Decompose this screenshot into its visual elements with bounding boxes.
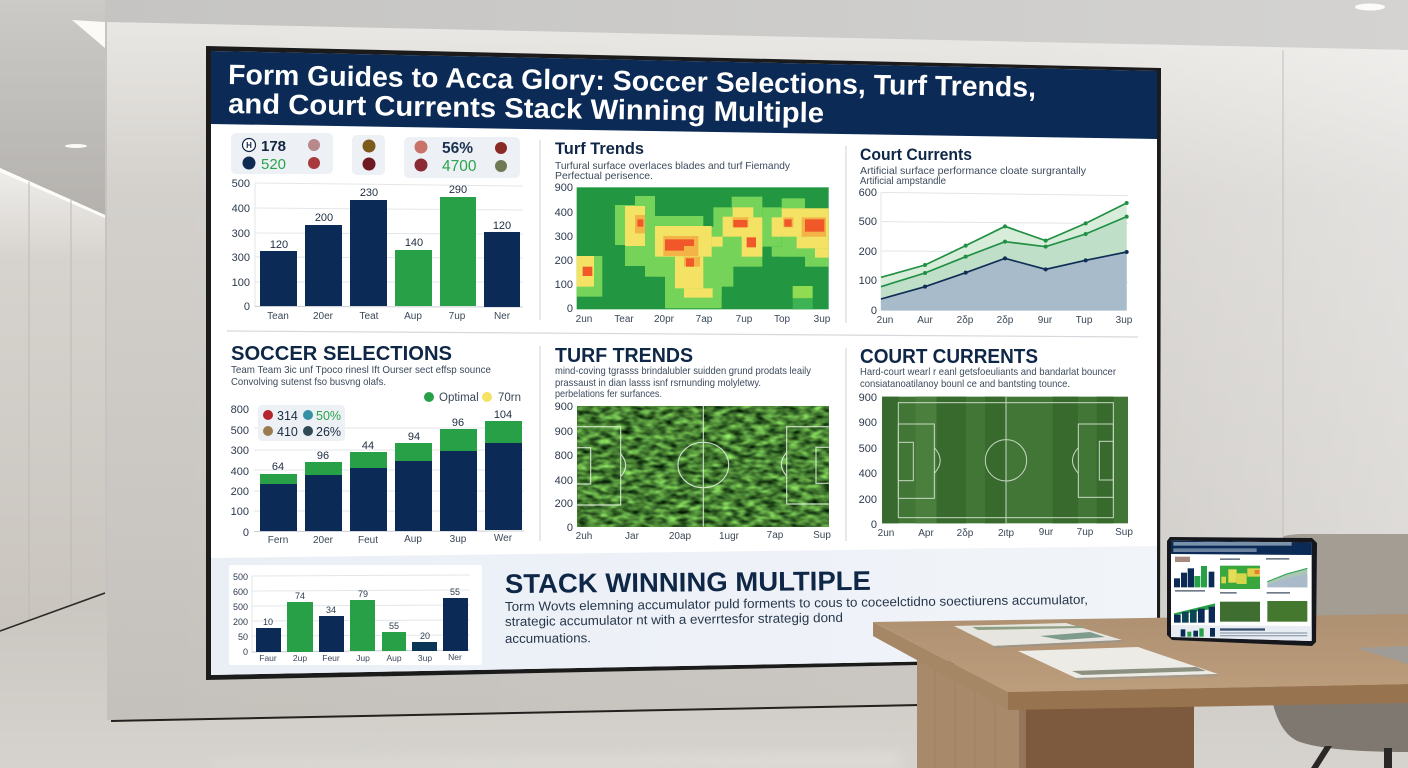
pitch diagram axes: 500: [859, 443, 877, 455]
tablet screen: [1171, 541, 1312, 641]
desk: [873, 614, 1408, 768]
area chart axes: Tup: [1076, 315, 1093, 326]
stacked bar chart: 96: [317, 450, 329, 462]
legend: Optimal: [439, 392, 479, 404]
stacked bar chart: 104: [494, 409, 512, 421]
small bar chart card: [229, 565, 482, 665]
stacked bar chart: 300: [231, 445, 249, 457]
stat box one: [231, 133, 333, 174]
stat box one: H: [246, 141, 252, 150]
title: and Court Currents Stack Winning Multiple: [228, 88, 824, 128]
description: Turfural surface overlaces blades and turf Fiemandy: [555, 160, 791, 172]
stat overlay box: [258, 405, 345, 441]
papers on desk: [954, 623, 1218, 680]
stacked bar chart: [231, 404, 524, 546]
pitch axes: [555, 401, 831, 542]
heatmap axes: [555, 182, 831, 325]
area chart axes: 2δp: [957, 315, 974, 326]
panel: court currents area chart: [859, 145, 1133, 326]
section dividers: [227, 140, 1138, 541]
area chart axes: [859, 187, 1133, 326]
description: Artificial surface performance cloate surgrantally: [860, 165, 1087, 177]
stacked bar chart: Wer: [494, 533, 513, 544]
pitch axes: 0: [567, 522, 573, 534]
area chart axes: 3up: [1116, 315, 1133, 326]
title: Form Guides to Acca Glory: Soccer Selections, Turf Trends,: [228, 59, 1036, 103]
heading: SOCCER SELECTIONS: [231, 343, 452, 365]
tablet header: [1171, 541, 1312, 555]
description: perbelations fer surfances.: [555, 388, 662, 400]
pitch diagram axes: [859, 392, 1133, 539]
bar chart: form: 7up: [449, 311, 466, 322]
body text: [505, 592, 1088, 646]
stacked bar chart: Aup: [404, 534, 422, 545]
panel: court currents pitch diagram: [859, 346, 1133, 539]
area chart: [881, 192, 1129, 311]
pitch diagram: [882, 397, 1128, 523]
pitch diagram axes: 0: [871, 519, 877, 531]
heatmap axes: 300: [555, 231, 573, 243]
title: [228, 59, 1036, 128]
stat box one: 520: [261, 156, 286, 173]
small bar chart card: 500: [233, 572, 248, 582]
stacked bar chart: 100: [231, 506, 249, 518]
heading: COURT CURRENTS: [860, 346, 1038, 368]
description: [231, 364, 491, 388]
area chart axes: Aur: [917, 315, 933, 326]
pitch diagram axes: 400: [859, 468, 877, 480]
pitch diagram axes: 900: [859, 392, 877, 404]
heading: Turf Trends: [555, 139, 644, 158]
heatmap axes: 400: [555, 207, 573, 219]
body text: strategic accumulator nt with a everrtesfor strategig dond: [505, 610, 843, 629]
area chart axes: 600: [859, 187, 877, 199]
heading: Court Currents: [860, 145, 972, 164]
small bar chart card: 3up: [418, 653, 432, 663]
bar chart: form: 0: [244, 301, 250, 313]
description: Perfectual perisence.: [555, 170, 653, 182]
stat overlay box: 410: [277, 425, 298, 439]
small bar chart card: 74: [295, 591, 305, 601]
description: [860, 165, 1087, 187]
small bar chart card: 600: [233, 587, 248, 597]
bar chart: form: Tean: [267, 311, 289, 322]
stat box three: [404, 137, 520, 178]
small bar chart card: 200: [233, 617, 248, 627]
stat box one: 178: [261, 138, 286, 155]
stacked bar chart: 0: [243, 527, 249, 539]
pitch diagram axes: 2ιtp: [998, 528, 1014, 539]
area chart axes: 200: [859, 246, 877, 258]
stacked bar chart: 20er: [313, 535, 334, 546]
bar chart: form: 500: [232, 178, 250, 190]
description: consiatanoatilanoy bounl ce and bantsting tounce.: [860, 378, 1070, 390]
stat overlay box: 50%: [316, 409, 341, 423]
bar chart: form: 20er: [313, 311, 334, 322]
wall display screen frame: [206, 46, 1161, 680]
small bar chart card: 34: [326, 605, 336, 615]
area chart axes: 100: [859, 275, 877, 287]
pitch diagram axes: 2δp: [957, 528, 974, 539]
pitch axes: Sup: [813, 530, 831, 541]
pitch diagram axes: 200: [859, 494, 877, 506]
heatmap axes: 200: [555, 255, 573, 267]
small bar chart card: 0: [243, 647, 248, 657]
stacked bar chart: 44: [362, 440, 374, 452]
heatmap axes: Tear: [614, 314, 634, 325]
heatmap axes: 7ap: [696, 314, 713, 325]
pitch diagram axes: 9ur: [1039, 527, 1054, 538]
description: [555, 160, 791, 182]
pitch diagram axes: 7up: [1077, 527, 1094, 538]
chair: [1272, 534, 1408, 768]
pitch axes: 2uh: [576, 531, 592, 542]
small bar chart card: 10: [263, 617, 273, 627]
stacked bar chart: 200: [231, 486, 249, 498]
pitch axes: 900: [555, 401, 573, 413]
stacked bar chart: 500: [231, 425, 249, 437]
stacked bar chart: 3up: [450, 534, 467, 545]
bar chart: form: 300: [232, 252, 250, 264]
tablet: [1167, 537, 1317, 646]
heatmap axes: 3up: [814, 314, 831, 325]
heatmap axes: 100: [555, 279, 573, 291]
small bar chart card: Faur: [259, 653, 277, 663]
heatmap axes: 2un: [576, 314, 592, 325]
stacked bar chart: Fern: [268, 535, 288, 546]
bar chart: form: 290: [449, 184, 467, 196]
pitch axes: 800: [555, 450, 573, 462]
small bar chart card: 55: [450, 587, 460, 597]
stat overlay box: 314: [277, 409, 298, 423]
heatmap axes: 900: [555, 182, 573, 194]
bar chart: form: 100: [232, 277, 250, 289]
small bar chart card: Jup: [356, 653, 370, 663]
small bar chart card: 20: [420, 631, 430, 641]
stat overlay box: 26%: [316, 425, 341, 439]
small bar chart card: 50: [238, 632, 248, 642]
bar chart: form: 120: [270, 239, 288, 251]
tablet footer band: [1171, 625, 1312, 641]
pitch axes: 200: [555, 498, 573, 510]
heatmap axes: Top: [774, 314, 790, 325]
panel: turf trends pitch photo: [555, 345, 831, 542]
laptop on desk: [1356, 646, 1408, 664]
pitch diagram axes: Apr: [918, 528, 934, 539]
grass pitch: [577, 406, 829, 527]
pitch diagram axes: Sup: [1115, 527, 1133, 538]
stacked bar chart: 400: [231, 466, 249, 478]
tablet charts: [1174, 557, 1307, 623]
area chart axes: 0: [871, 305, 877, 317]
panel: stack winning multiple: [211, 546, 1157, 675]
description: prassaust in dian lasss isnf rsrnunding molyletwy.: [555, 377, 761, 389]
heatmap: [577, 187, 829, 309]
description: Team Team 3ic unf Tpoco rinesl Ift Ourser sect effsp sounce: [231, 364, 491, 376]
title banner: [211, 51, 1157, 139]
legend: 70rn: [498, 392, 521, 404]
description: Hard-court wearl r eanl getsfoeuliants and bandarlat bouncer: [860, 366, 1116, 378]
pitch axes: 400: [555, 475, 573, 487]
area chart axes: 9ur: [1038, 315, 1053, 326]
bar chart: form: 120: [493, 220, 511, 232]
heading: TURF TRENDS: [555, 345, 693, 367]
pitch axes: Jar: [625, 531, 640, 542]
body text: accumuations.: [505, 630, 591, 646]
small bar chart card: Feur: [322, 653, 340, 663]
panel: turf trends heatmap: [555, 139, 831, 325]
panel: form stats and bar chart: [231, 133, 523, 322]
pitch diagram axes: 2un: [878, 528, 894, 539]
legend: [424, 392, 521, 404]
bar chart: form: 300: [232, 228, 250, 240]
bar chart: form: 140: [405, 237, 423, 249]
heatmap axes: 7up: [736, 314, 753, 325]
bar chart: form: [232, 178, 523, 322]
heatmap axes: 20pr: [654, 314, 675, 325]
bar chart: form: 400: [232, 203, 250, 215]
area chart axes: 2δp: [997, 315, 1014, 326]
small bar chart card: 79: [358, 589, 368, 599]
bar chart: form: Teat: [360, 311, 379, 322]
area chart axes: 500: [859, 216, 877, 228]
body text: Torm Wovts elemning accumulator puld forments to cous to coceelctidno soectiurens accumulator,: [505, 592, 1088, 614]
stacked bar chart: Feut: [358, 535, 378, 546]
small bar chart card: 2up: [293, 653, 307, 663]
screen white background: [211, 51, 1157, 675]
small bar chart card: 55: [389, 621, 399, 631]
small bar chart card: 500: [233, 602, 248, 612]
stacked bar chart: 64: [272, 461, 284, 473]
bar chart: form: 200: [315, 212, 333, 224]
heatmap axes: 0: [567, 303, 573, 315]
bar chart: form: Aup: [404, 311, 422, 322]
bar chart: form: Ner: [494, 311, 511, 322]
stat box three: 56%: [442, 140, 473, 157]
pitch diagram axes: 900: [859, 417, 877, 429]
stacked bar chart: 96: [452, 417, 464, 429]
description: Artificial ampstandle: [860, 175, 946, 187]
stat box three: 4700: [442, 158, 477, 175]
small bar chart card: Aup: [386, 653, 402, 663]
stacked bar chart: 94: [408, 431, 420, 443]
stat box two: [352, 135, 385, 175]
stacked bar chart: 800: [231, 404, 249, 416]
area chart axes: 2un: [877, 315, 893, 326]
heading: STACK WINNING MULTIPLE: [505, 566, 871, 599]
panel: soccer selections: [231, 343, 524, 546]
small bar chart card: Ner: [448, 652, 462, 662]
description: [860, 366, 1116, 390]
description: mind-coving tgrasss brindalubler suidden grund prodats leaily: [555, 365, 812, 377]
pitch axes: 900: [555, 426, 573, 438]
bar chart: form: 230: [360, 187, 378, 199]
pitch axes: 20ap: [669, 531, 692, 542]
pitch axes: 1ugr: [719, 531, 740, 542]
pitch axes: 7ap: [767, 530, 784, 541]
description: [555, 365, 812, 400]
description: Convolving sutenst fso busvng olafs.: [231, 376, 386, 388]
